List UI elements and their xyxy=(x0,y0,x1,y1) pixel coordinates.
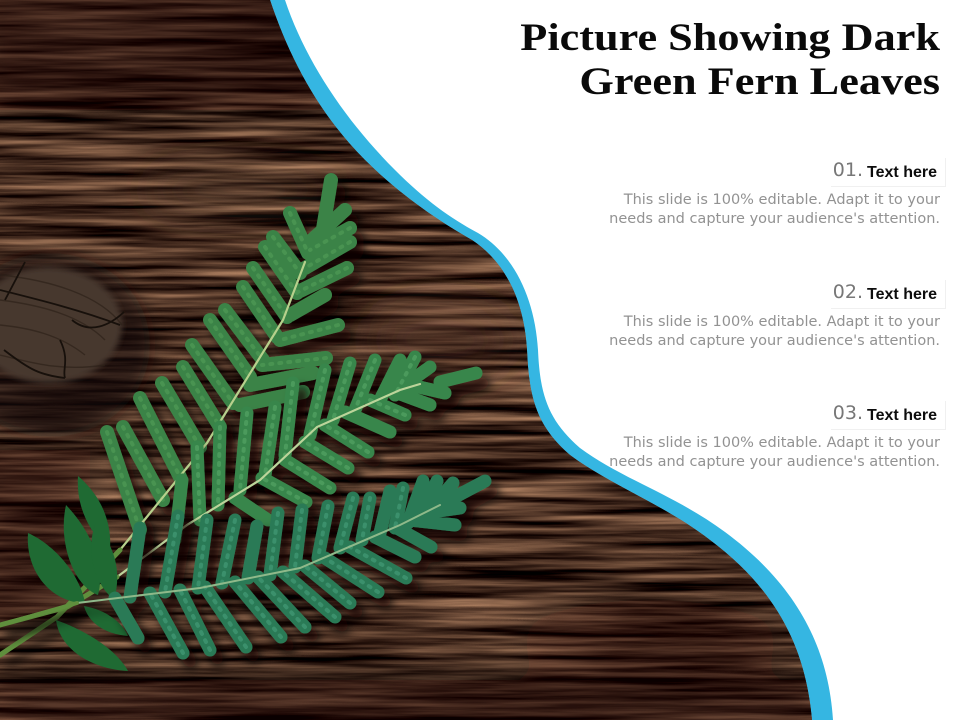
text item 02 xyxy=(609,280,946,348)
text item 01: 01. xyxy=(833,159,863,181)
text item 03: 03. xyxy=(833,402,863,424)
title xyxy=(520,16,940,103)
fern frond: bottom xyxy=(0,481,485,653)
blue curved band xyxy=(270,0,833,720)
text item 03: This slide is 100% editable. Adapt it to your xyxy=(624,435,940,451)
text item 03: needs and capture your audience's attention. xyxy=(609,454,940,470)
title: Green Fern Leaves xyxy=(579,60,940,103)
text item 01 xyxy=(609,158,946,226)
fern frond: top xyxy=(0,180,350,655)
text item 02: 02. xyxy=(833,281,863,303)
text item 03: Text here xyxy=(867,407,937,424)
text item 02: This slide is 100% editable. Adapt it to your xyxy=(624,314,940,330)
text item 02: Text here xyxy=(867,286,937,303)
text item 01: This slide is 100% editable. Adapt it to your xyxy=(624,192,940,208)
text item 02: needs and capture your audience's attention. xyxy=(609,332,940,348)
fern frond: middle xyxy=(0,357,476,625)
title: Picture Showing Dark xyxy=(520,16,940,59)
wood knot xyxy=(0,253,150,437)
text item 01: needs and capture your audience's attention. xyxy=(609,210,940,226)
text item 03 xyxy=(609,401,946,470)
fern frond: lower-left dark leaves xyxy=(28,476,128,671)
text item 01: Text here xyxy=(867,164,937,181)
